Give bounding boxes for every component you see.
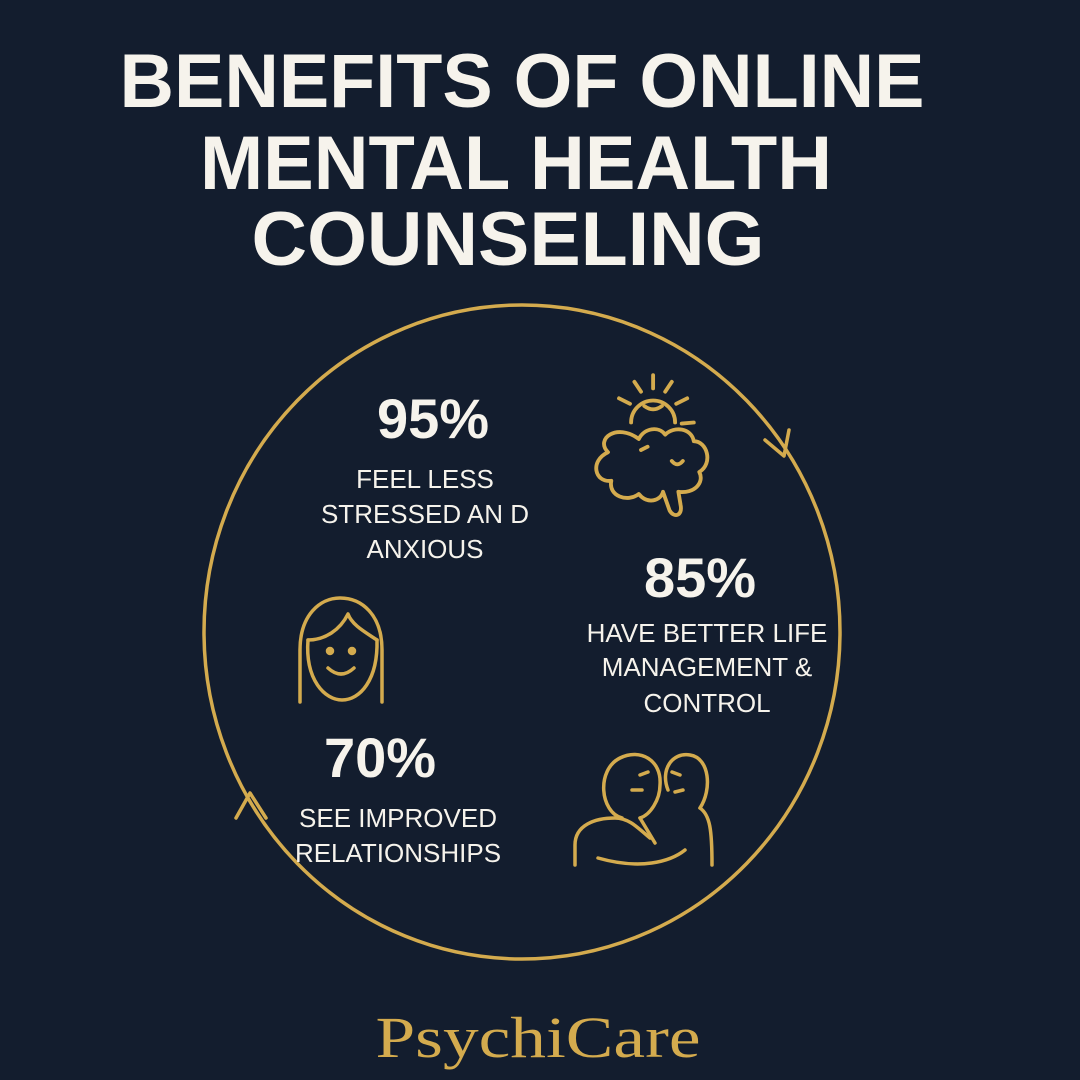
stat: 70%: 70% (324, 726, 436, 789)
stat: 85% (587, 546, 827, 718)
stat: 70% (295, 726, 501, 868)
arrow: top right (765, 430, 789, 456)
stat: 85%: HAVE BETTER LIFE (587, 618, 827, 648)
stat: 70%: RELATIONSHIPS (295, 838, 501, 868)
title (120, 39, 924, 282)
icon: smiling face (300, 598, 382, 702)
title: COUNSELING (252, 197, 764, 282)
stat: 95%: 95% (377, 387, 489, 450)
stat: 85%: MANAGEMENT & (602, 652, 812, 682)
stat: 85%: 85% (644, 546, 756, 609)
title: BENEFITS OF ONLINE (120, 39, 924, 124)
brand logo: PsychiCare (376, 1005, 700, 1070)
icon: brain with sun (596, 375, 707, 515)
stat: 85%: CONTROL (643, 688, 771, 718)
stat: 95%: FEEL LESS (356, 464, 494, 494)
stat: 70%: SEE IMPROVED (299, 803, 497, 833)
stat: 95%: ANXIOUS (366, 534, 484, 564)
arrow: bottom left (236, 793, 266, 818)
stat: 95%: STRESSED AN D (321, 499, 529, 529)
icon: two people embracing (575, 754, 712, 865)
circle cycle ring (204, 305, 840, 959)
stat: 95% (321, 387, 529, 564)
title: MENTAL HEALTH (200, 121, 832, 206)
